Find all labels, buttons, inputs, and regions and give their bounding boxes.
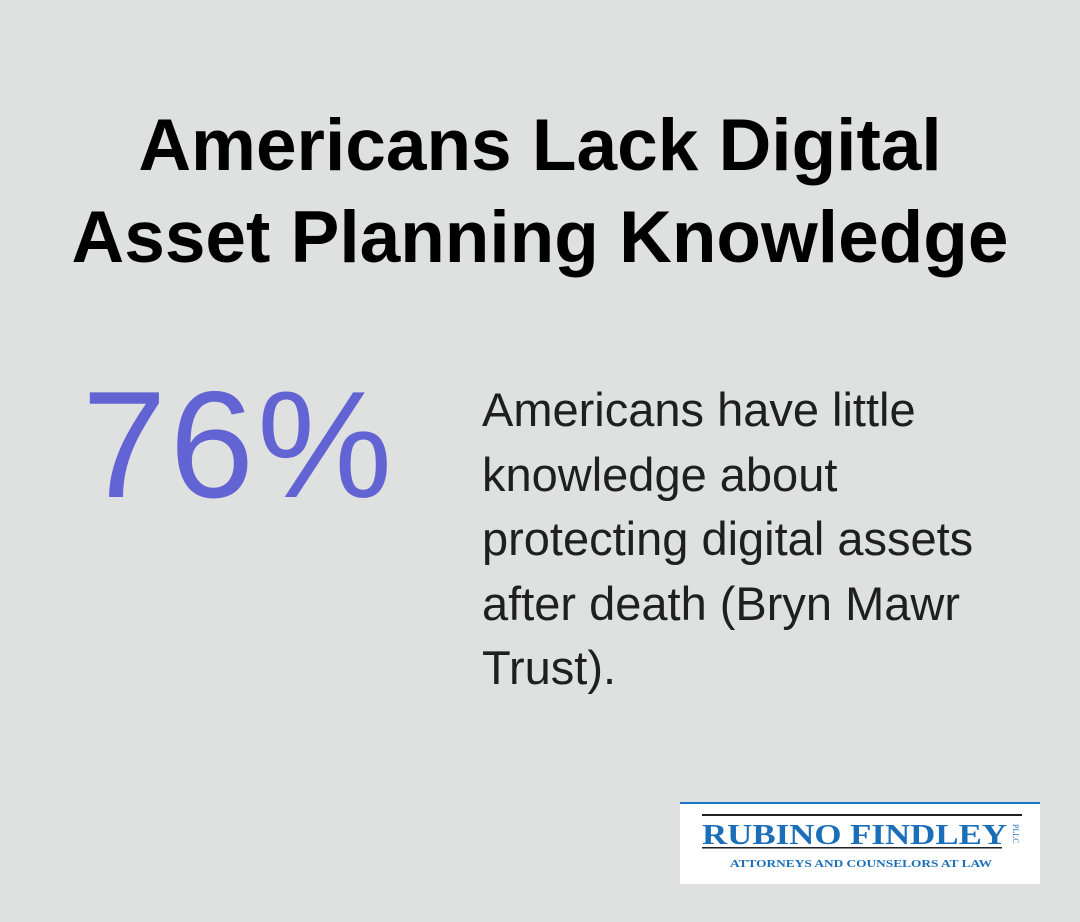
description: protecting digital assets: [482, 512, 973, 565]
logo: [680, 802, 1040, 884]
logo: RUBINO FINDLEY: [702, 819, 1007, 851]
description: knowledge about: [482, 448, 837, 500]
description: after death (Bryn Mawr: [482, 576, 960, 630]
description: Trust).: [482, 641, 616, 694]
title: [72, 105, 1008, 278]
logo: ATTORNEYS AND COUNSELORS AT LAW: [730, 859, 992, 870]
description: Americans have little: [482, 383, 916, 436]
stat number: 76%: [82, 360, 395, 530]
title: Americans Lack Digital: [138, 105, 942, 186]
logo: PLLC: [1011, 824, 1020, 844]
title: Asset Planning Knowledge: [72, 197, 1008, 278]
description: [482, 383, 973, 694]
